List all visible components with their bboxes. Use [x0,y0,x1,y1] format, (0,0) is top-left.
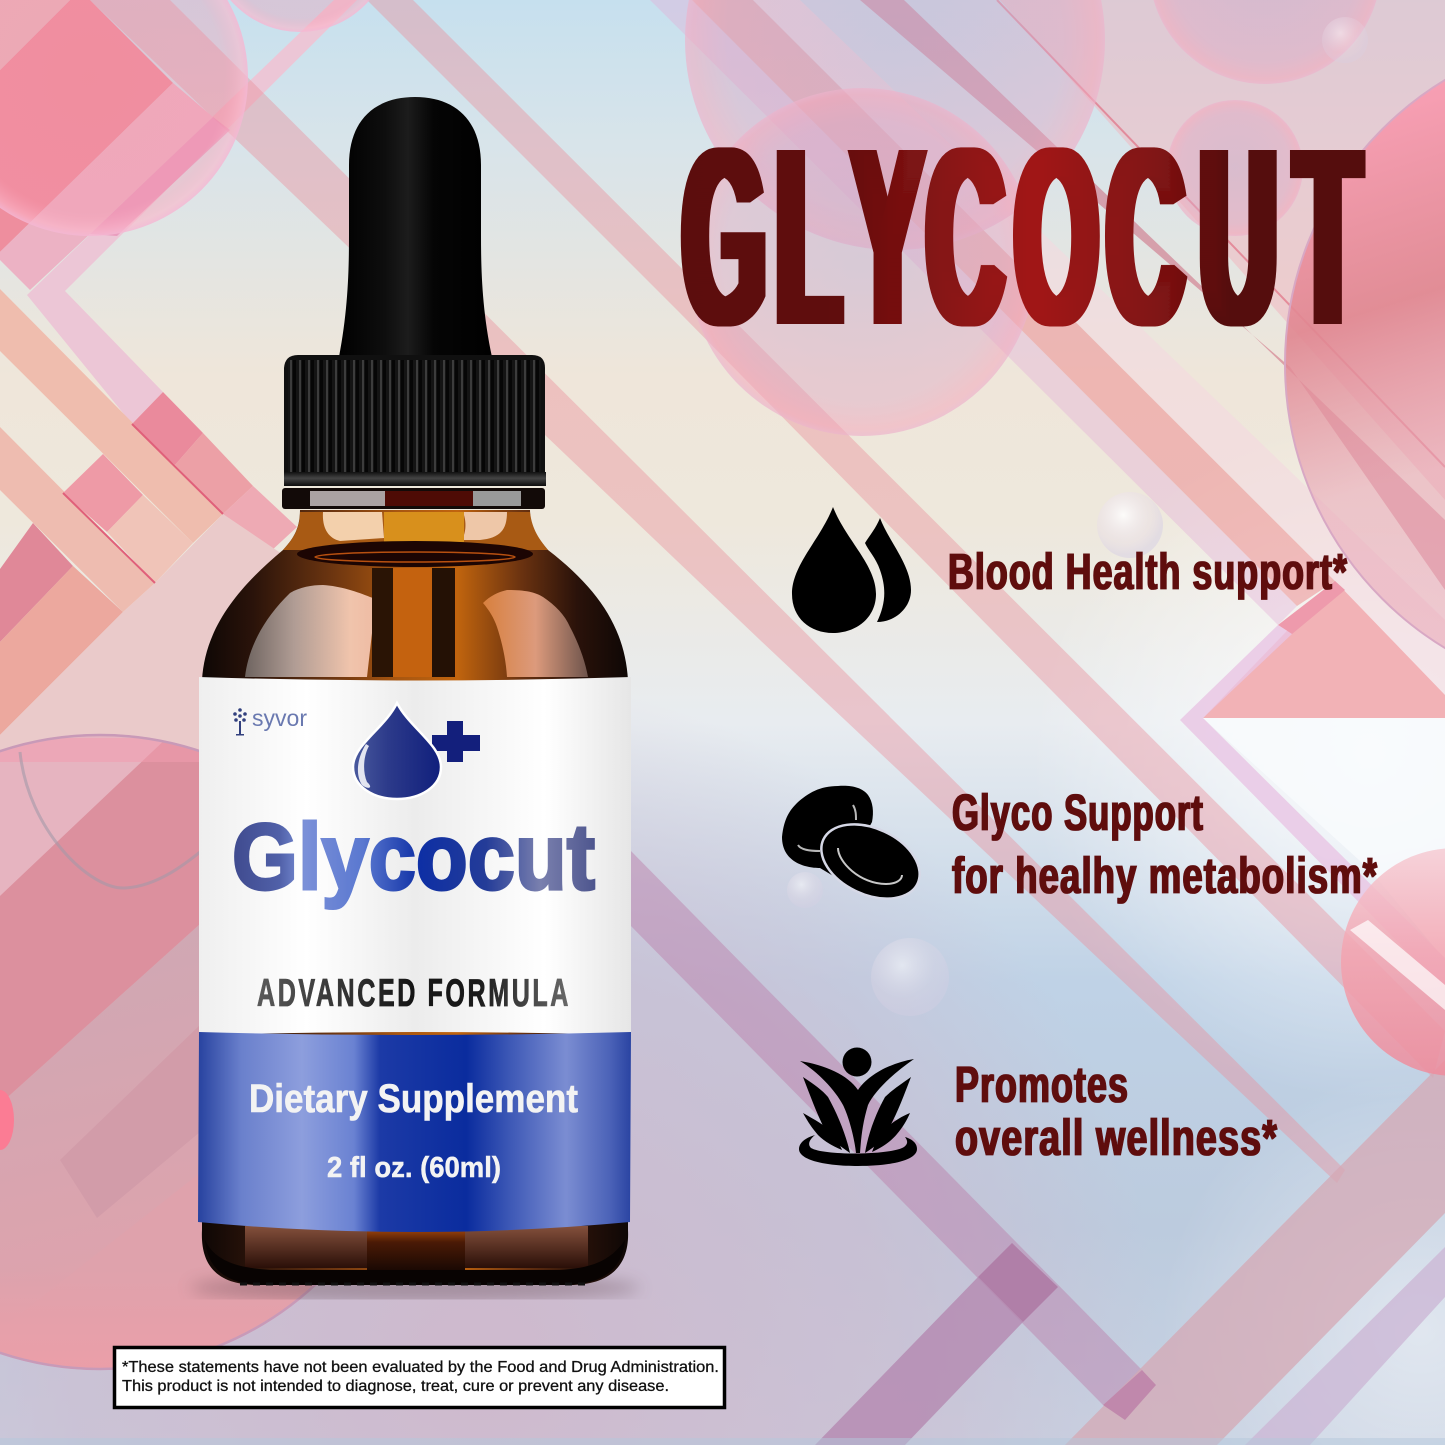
icon: wellness figure [799,1048,917,1166]
neck highlights [283,512,548,550]
disclaimer box [114,1348,724,1408]
dropper tube [372,568,456,677]
left shoulder shine [245,585,385,677]
title: GLYCOCUT [683,96,1360,379]
benefit: wellness: overall wellness* [955,1109,1278,1166]
disclaimer box: *These statements have not been evaluated by the Food and Drug Administration. [122,1359,719,1376]
cap [282,355,546,509]
product bottle [190,97,640,1302]
drop logo with plus [353,703,480,799]
benefit: wellness: Promotes [955,1056,1129,1113]
tree mark [233,708,247,736]
label blue section [198,1032,631,1232]
base glass [245,1226,588,1268]
advanced formula: ADVANCED FORMULA [257,972,571,1015]
product name: Glycocut [232,804,595,909]
label white section [199,677,631,1035]
volume: 2 fl oz. (60ml) [327,1152,501,1184]
amber glass [202,510,628,1285]
icon: blood cells [782,786,932,913]
brand: syvor: syvor [252,705,307,731]
dietary supplement: Dietary Supplement [249,1077,578,1121]
benefit: glyco support [952,784,1378,904]
icon: blood drops [792,507,911,633]
right shoulder shine [483,590,588,677]
dropper bulb [339,97,492,357]
shoulder ring [297,541,533,567]
benefit: glyco support: Glyco Support [952,784,1204,841]
benefit: wellness [955,1056,1278,1166]
left geometric bands [0,0,1345,1183]
bottle ground shadow [190,1274,640,1302]
brand: syvor [233,705,307,736]
disclaimer box: This product is not intended to diagnose, treat, cure or prevent any disease. [122,1378,669,1395]
